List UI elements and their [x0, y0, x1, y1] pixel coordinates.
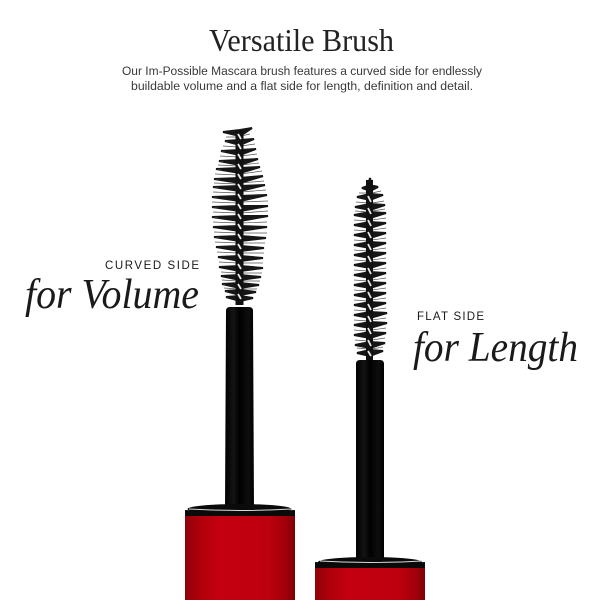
curved tube collar band: [185, 510, 295, 517]
curved brush fine strands: [212, 134, 268, 289]
flat wand stem: [356, 360, 384, 562]
flat tube collar: [318, 557, 422, 567]
curved mascara wand: [185, 128, 295, 600]
curved tube rim highlight: [189, 509, 291, 510]
curved brush twisted highlights: [238, 134, 241, 299]
curved brush core: [236, 130, 244, 305]
curved brush bristles: [212, 128, 268, 301]
flat brush fine strands: [354, 191, 386, 349]
flat tube rim highlight: [320, 561, 422, 562]
title: Versatile Brush: [209, 22, 394, 58]
description text: buildable volume and a flat side for length, definition and detail.: [131, 79, 473, 93]
label: curved side for volume: for Volume: [25, 272, 199, 318]
flat brush twisted highlights: [368, 196, 371, 356]
curved wand stem: [225, 307, 254, 512]
flat brush core: [366, 180, 373, 360]
label: flat side for length: FLAT SIDE: [417, 311, 484, 323]
flat brush bristles: [354, 178, 387, 356]
label: curved side for volume: CURVED SIDE: [105, 260, 199, 272]
curved tube red body: [185, 516, 295, 600]
label: flat side for length: for Length: [413, 325, 578, 371]
flat tube red body: [315, 568, 425, 600]
description text: Our Im-Possible Mascara brush features a curved side for endlessly: [122, 64, 483, 78]
curved tube collar: [188, 504, 292, 514]
flat tube collar band: [315, 562, 425, 569]
flat mascara wand: [315, 178, 425, 600]
description text: [122, 64, 483, 93]
